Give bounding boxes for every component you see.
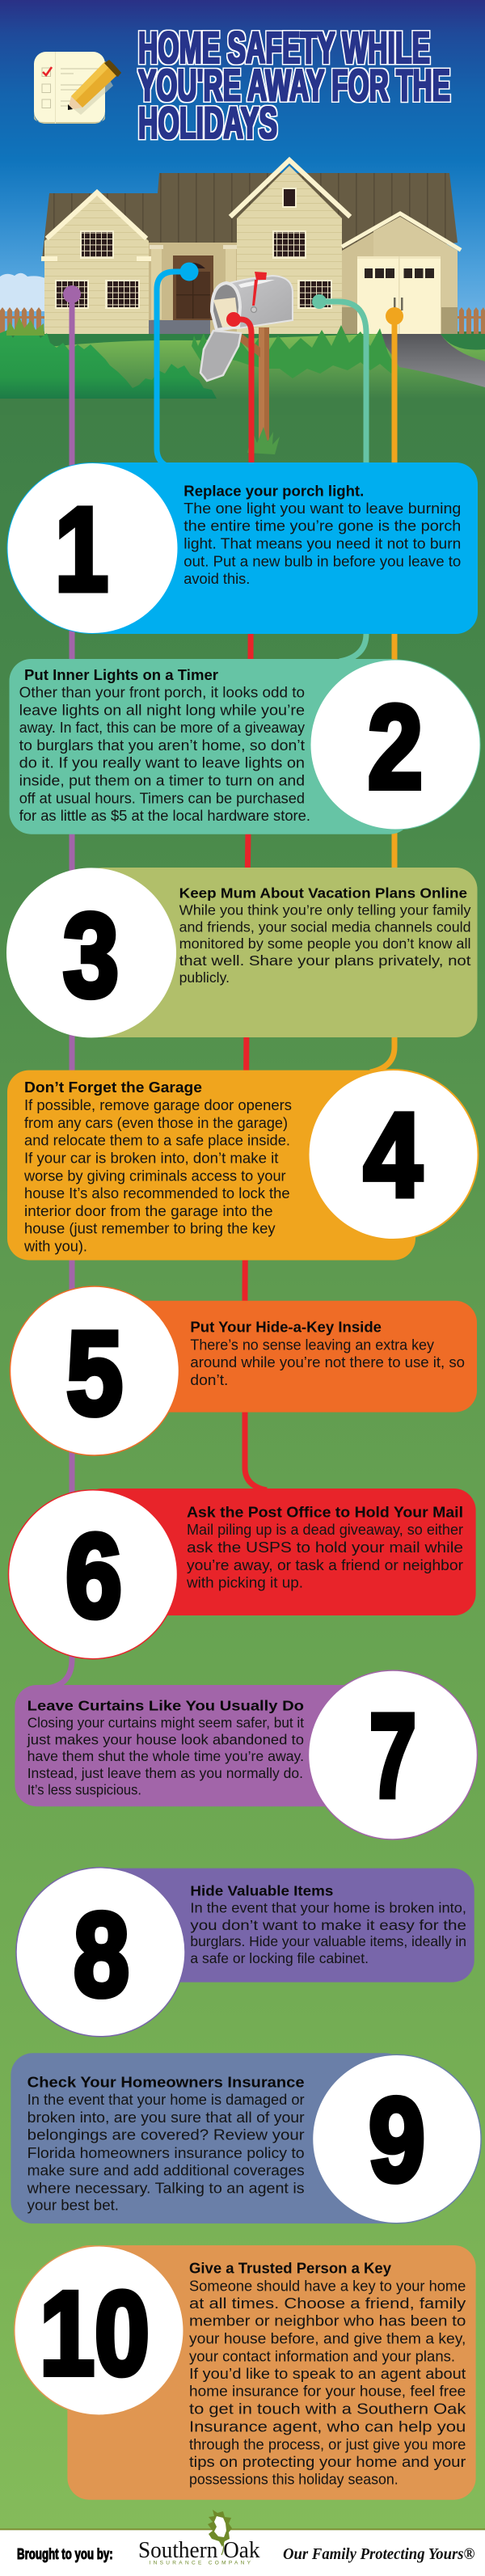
mailbox body (217, 276, 293, 328)
panel 3 body: publicly. (179, 969, 230, 986)
panel 1 body: The one light you want to leave burning (183, 500, 461, 517)
panel 1 body: the entire time you’re gone is the porch (183, 517, 461, 534)
panel 10 body: Insurance agent, who can help you (189, 2418, 466, 2435)
number 3 badge: 3 (63, 889, 119, 1022)
panel 8 body: burglars. Hide your valuable items, ideally in (190, 1933, 466, 1949)
panel 9 background (11, 2053, 407, 2223)
wire: teal (319, 302, 366, 661)
panel 4 body: with you). (23, 1237, 87, 1254)
panel 9 body: your best bet. (27, 2196, 119, 2213)
mailbox highlight (238, 280, 275, 288)
panel 10 body: tips on protecting your home and your (189, 2453, 466, 2470)
panel 7 body: have them shut the whole time you’re away. (27, 1748, 304, 1764)
panel 2 body: off at usual hours. Timers can be purchased (19, 789, 305, 806)
panel 9 body: Florida homeowners insurance policy to (27, 2144, 305, 2161)
panel 7 body: It’s less suspicious. (27, 1781, 141, 1797)
panel 9: homeowners insurance (11, 2053, 481, 2223)
panel 4 background (7, 1071, 415, 1261)
wire: purple (47, 294, 72, 1688)
panel 8 heading: Hide Valuable Items (190, 1883, 334, 1899)
panel 10 heading: Give a Trusted Person a Key (189, 2260, 392, 2277)
panel 10 body: to get in touch with a Southern Oak (189, 2401, 466, 2418)
panel 1 body: light. That means you need it not to burn (183, 535, 461, 552)
number 7 badge: 7 (369, 1690, 416, 1822)
panel 10 body: member or neighbor who has been to (189, 2312, 466, 2329)
house porch (149, 243, 238, 335)
title (138, 22, 450, 148)
panel 8 body: a safe or locking file cabinet. (190, 1950, 369, 1966)
panel 6 heading: Ask the Post Office to Hold Your Mail (187, 1503, 463, 1520)
mailbox opening (212, 283, 240, 330)
mailbox post (259, 327, 269, 441)
footer rule (0, 2528, 485, 2530)
panel 2 body: to burglars that you aren’t home, so don’t (19, 737, 305, 754)
number 6 badge: 6 (65, 1510, 122, 1643)
fences (0, 307, 485, 335)
footer background (0, 2530, 485, 2576)
title: HOLIDAYS (138, 97, 277, 148)
panel 4 body: interior door from the garage into the (24, 1202, 273, 1219)
icon: notepad and pencil (34, 52, 121, 124)
number 3 badge (6, 868, 176, 1037)
number 5 badge: 5 (66, 1307, 123, 1440)
number 2 badge: 2 (368, 681, 423, 813)
ground band (0, 334, 485, 399)
wires (47, 272, 394, 1688)
panel 9 body: belongings are covered? Review your (27, 2126, 305, 2143)
panel 4 body: and relocate them to a safe place inside. (24, 1132, 290, 1148)
panel 5 body: around while you’re not there to use it, so (190, 1353, 465, 1370)
panel 9 heading: Check Your Homeowners Insurance (27, 2073, 305, 2090)
panel 7 background (15, 1685, 403, 1806)
panel 2 background (10, 659, 412, 834)
panel 3 heading: Keep Mum About Vacation Plans Online (179, 885, 467, 902)
panel 3 body (179, 902, 471, 986)
panel 8 background (81, 1869, 474, 1983)
panel 5 background (81, 1301, 477, 1413)
number 4 badge (309, 1070, 479, 1239)
panel 6 background (81, 1489, 476, 1615)
house garage door (357, 256, 441, 335)
panel 1 background (81, 462, 478, 634)
house trim (44, 160, 459, 259)
panel 1 body: avoid this. (183, 570, 250, 587)
bushes (0, 328, 217, 399)
panel 2 body: inside, put them on a timer to turn on and (19, 772, 305, 789)
panel 6 body: with picking it up. (186, 1574, 303, 1591)
number 10 badge (15, 2246, 183, 2415)
panel 8 body: In the event that your home is broken into, (190, 1900, 466, 1916)
panel 1 heading: Replace your porch light. (183, 482, 364, 499)
brought to you by: Brought to you by: (17, 2546, 113, 2562)
panel 7 body: Closing your curtains might seem safer, but it (27, 1715, 304, 1731)
number 8 badge (16, 1868, 185, 2037)
house center section (237, 166, 342, 335)
panel 2 body: Other than your front porch, it looks odd to (19, 684, 305, 701)
dark hedge band behind lawn (0, 334, 485, 350)
panel 6 body (186, 1521, 463, 1591)
number 10 badge: 10 (40, 2267, 150, 2400)
cloud (0, 273, 45, 311)
panel 2 body: away. In fact, this can be more of a giveaway (19, 719, 306, 736)
number 7 badge (309, 1670, 477, 1839)
tagline: Our Family Protecting Yours® (283, 2545, 475, 2563)
panel 1 body (183, 500, 461, 587)
panel 10 body: your contact information and your plans. (189, 2347, 455, 2364)
panel 9 body (27, 2091, 305, 2213)
panel 5 body: don’t. (190, 1371, 228, 1388)
panel 1: replace your porch light (7, 462, 478, 634)
mailbox door (200, 331, 241, 381)
panel 3 body: that well. Share your plans privately, not (179, 952, 471, 969)
panel 10 body: through the process, or just give you more (189, 2435, 466, 2452)
panel 5 heading: Put Your Hide-a-Key Inside (190, 1318, 382, 1335)
panel 6 body: you’re away, or task a friend or neighbor (187, 1556, 463, 1573)
number 1 badge (7, 462, 178, 634)
house columns (150, 245, 237, 319)
mailbox flag (251, 272, 267, 312)
panel 10 body: your house before, and give them a key, (189, 2330, 466, 2347)
number 4 badge: 4 (364, 1089, 422, 1222)
panel 9 body: In the event that your home is damaged or (27, 2091, 305, 2108)
panel 6 body: ask the USPS to hold your mail while (187, 1539, 463, 1556)
house left wing (44, 194, 149, 335)
panel 1 body: out. Put a new bulb in before you leave to (183, 552, 461, 569)
panel 8 body (190, 1900, 466, 1966)
driveway (376, 334, 485, 387)
logo: Southern Oak: Southern Oak (138, 2538, 260, 2563)
number 9 badge: 9 (369, 2074, 425, 2206)
panel 10 body: Someone should have a key to your home (189, 2277, 466, 2294)
panel 10 body: home insurance for your house, feel free (189, 2383, 466, 2400)
panel 10 body (189, 2277, 466, 2488)
house roof (42, 173, 458, 260)
panel 5 body (190, 1336, 465, 1388)
panel 3 body: monitored by some people you don’t know all (179, 935, 470, 952)
wire: red (234, 319, 267, 1490)
logo subtitle: INSURANCE COMPANY (149, 2561, 251, 2566)
panel 10 background (67, 2245, 476, 2500)
panel 9 body: broken into, are you sure that all of your (27, 2109, 305, 2126)
house door (173, 255, 213, 320)
house steps (149, 320, 210, 335)
house (42, 160, 459, 335)
panel 4 body: worse by giving criminals access to your (23, 1167, 286, 1184)
wire: orange (370, 316, 394, 1072)
panel 4: garage (7, 1070, 479, 1261)
panel 2 body (19, 684, 310, 824)
panel 4 body: house (just remember to bring the key (24, 1220, 276, 1237)
number 8 badge: 8 (74, 1889, 129, 2021)
panel 3 body: While you think you’re only telling your family (179, 902, 471, 918)
panel 3 body: and friends, your social media channels could (179, 918, 470, 935)
panel 4 body: If possible, remove garage door openers (24, 1096, 292, 1113)
panel 7 heading: Leave Curtains Like You Usually Do (27, 1698, 304, 1714)
house windows (56, 188, 331, 308)
number 6 badge (8, 1490, 178, 1659)
panel 9 body: make sure and add additional coverages (27, 2162, 305, 2178)
panel 2 body: for as little as $5 at the local hardware store. (19, 807, 310, 824)
bush left tuft (6, 317, 44, 336)
panel 10 body: possessions this holiday season. (189, 2471, 399, 2488)
panel 6 body: Mail piling up is a dead giveaway, so either (187, 1521, 463, 1538)
panel 4 body: house It’s also recommended to lock the (24, 1185, 290, 1201)
panel 7: curtains (15, 1670, 477, 1839)
panel 6: post office (8, 1489, 476, 1659)
mailbox letter (213, 298, 238, 327)
panel 2 body: leave lights on all night long while you’re (19, 701, 305, 718)
panel 5 body: There’s no sense leaving an extra key (190, 1336, 435, 1353)
mailbox (200, 272, 293, 441)
grass tufts behind mailbox (192, 325, 394, 378)
panel 3: vacation plans online (6, 868, 477, 1037)
panel 2: inner lights on a timer (10, 659, 480, 834)
panel 4 body (23, 1096, 292, 1254)
panel 9 body: where necessary. Talking to an agent is (27, 2179, 305, 2196)
panel 7 body (27, 1715, 304, 1797)
panel 3 background (81, 868, 477, 1037)
panel 2 heading: Put Inner Lights on a Timer (24, 666, 218, 683)
footer (0, 2510, 485, 2576)
panel 10 body: at all times. Choose a friend, family (189, 2295, 466, 2312)
icon: oak leaf (208, 2510, 232, 2555)
panel 8: valuables (16, 1868, 474, 2037)
house garage (342, 217, 458, 335)
number 5 badge (10, 1286, 179, 1455)
grass tuft at post base (247, 427, 280, 454)
panel 7 body: Instead, just leave them as you normally do. (27, 1765, 303, 1781)
background: sky (0, 0, 485, 340)
wire dots (63, 262, 403, 327)
panel 4 body: If your car is broken into, don’t make it (24, 1149, 278, 1166)
panel 10: trusted person (15, 2245, 476, 2500)
number 1 badge: 1 (55, 484, 108, 616)
panel 4 body: from any cars (even those in the garage) (24, 1114, 288, 1131)
panel 2 body: do it. If you really want to leave lights on (19, 754, 305, 771)
panel 7 body: just makes your house look abandoned to (27, 1732, 304, 1748)
panel 4 heading: Don’t Forget the Garage (24, 1079, 202, 1096)
number 2 badge (310, 660, 480, 830)
panel 5: hide-a-key (10, 1286, 477, 1455)
wire: blue (157, 272, 189, 466)
panel 10 body: If you’d like to speak to an agent about (189, 2365, 466, 2382)
ground lower (0, 399, 485, 415)
number 9 badge (312, 2054, 481, 2223)
panel 8 body: you don’t want to make it easy for the (190, 1917, 466, 1933)
